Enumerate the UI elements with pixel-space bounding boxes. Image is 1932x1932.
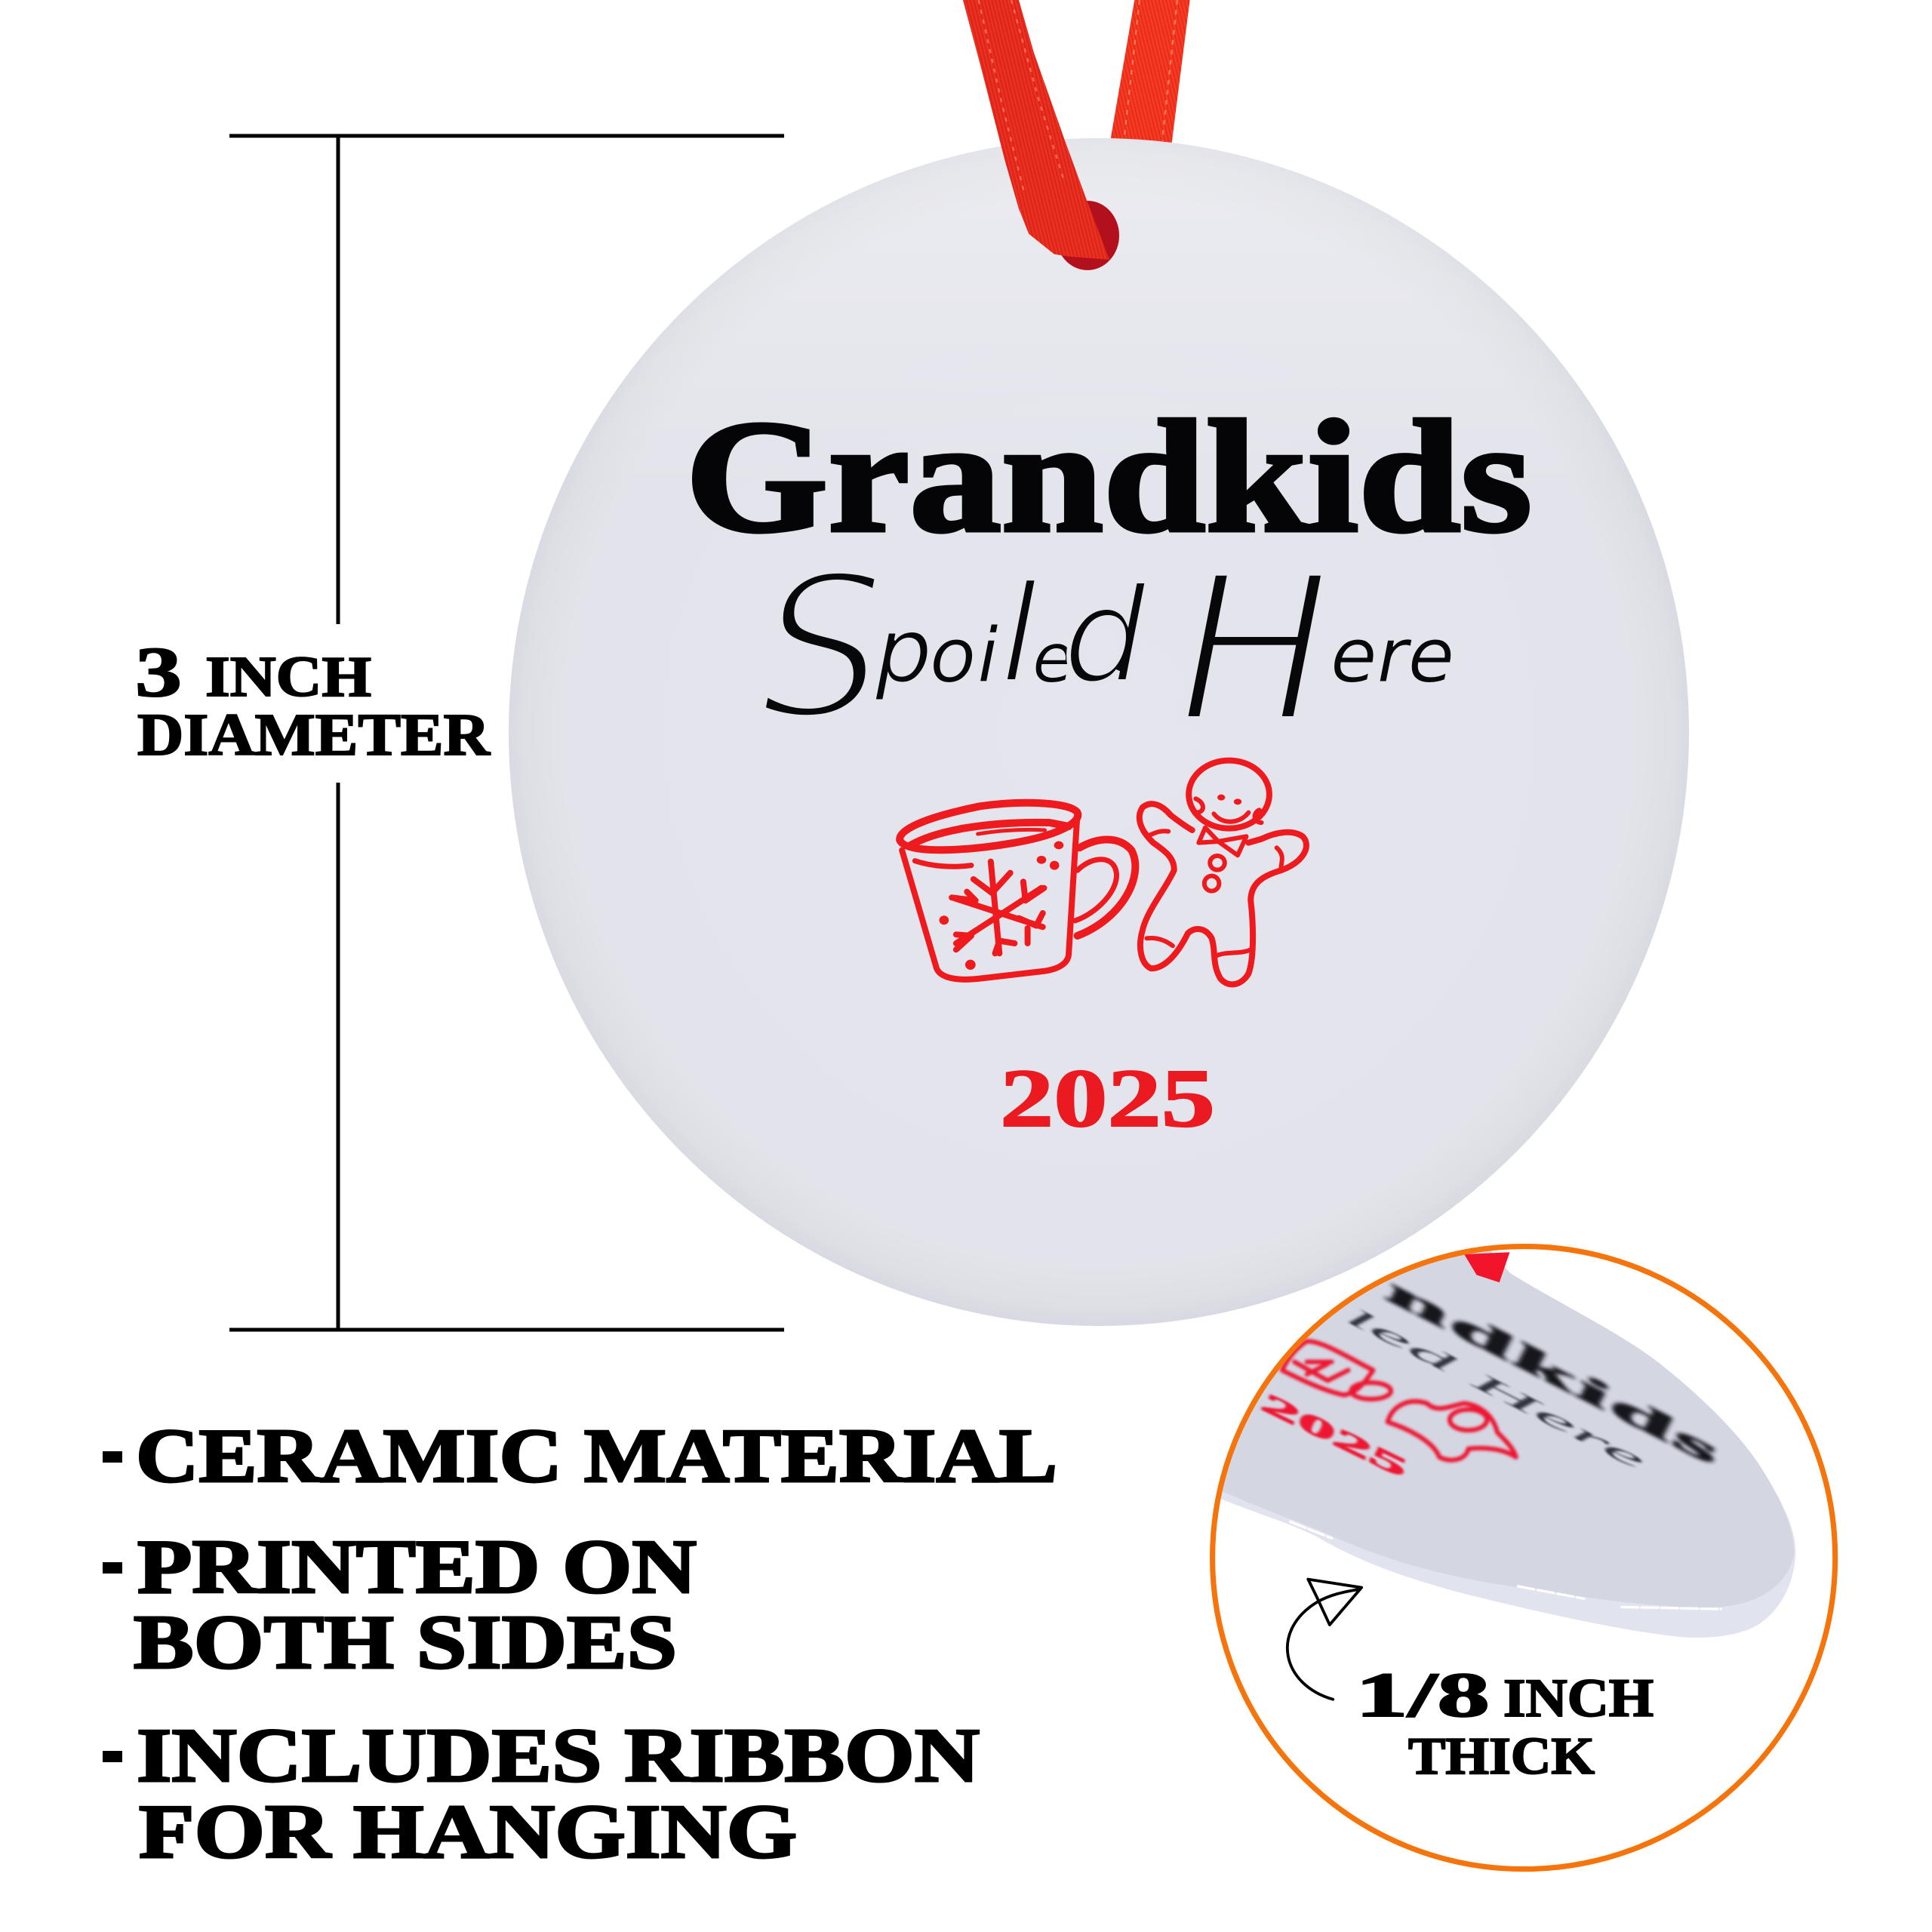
dimension bracket: 3 inch diameter (229, 136, 784, 1330)
hanging hole (1056, 201, 1119, 270)
lens blurred icons (1282, 1341, 1516, 1460)
ornament script: Spoiled Here: d (1063, 560, 1189, 713)
lens ornament side edge (1221, 1477, 1796, 1638)
lens orange ring (1213, 1247, 1835, 1869)
dimension label: 3 inch diameter: 3 (135, 633, 182, 712)
lens blurred title: ndkids (1380, 1270, 1729, 1474)
feature: ceramic material: CERAMIC MATERIAL (136, 1414, 1057, 1499)
lens blurred year: 2025 (1257, 1387, 1413, 1484)
ornament script: Spoiled Here: ere (1331, 611, 1454, 700)
dimension label: 3 inch diameter: INCH (205, 645, 371, 709)
lens ornament top face (1223, 1251, 1794, 1607)
feature: includes ribbon for hanging: INCLUDES RIBBON (137, 1713, 980, 1798)
feature: printed on both sides: BOTH SIDES (134, 1600, 677, 1685)
icon: gingerbread man (1140, 761, 1306, 984)
feature: includes ribbon for hanging: FOR HANGING (139, 1789, 797, 1875)
icon: mug with snowflake (900, 803, 1135, 980)
thickness label: 1/8 inch thick: INCH (1503, 1668, 1654, 1728)
ornament ribbon front strand (963, 0, 1109, 260)
lens ribbon stub (1464, 1252, 1509, 1282)
ornament script: Spoiled Here: l (1000, 556, 1038, 714)
ornament script: Spoiled Here: o (930, 611, 976, 700)
ornament title: Grandkids: Grandkids (685, 388, 1532, 566)
feature: printed on both sides: PRINTED ON (137, 1524, 697, 1610)
icon: curved arrow (1287, 1580, 1361, 1700)
ornament script: Spoiled Here: S (759, 532, 886, 764)
lens: side view detail (1187, 1229, 1835, 1869)
thickness label: 1/8 inch thick: THICK (1408, 1727, 1595, 1786)
dimension label: 3 inch diameter: DIAMETER (137, 703, 491, 768)
ornament script: Spoiled Here: p (875, 598, 932, 703)
ornament script: Spoiled Here: H (1177, 531, 1332, 770)
thickness label: 1/8 inch thick (1355, 1660, 1654, 1786)
feature list (103, 1414, 1057, 1875)
feature: printed on both sides (103, 1524, 697, 1685)
feature: includes ribbon for hanging (103, 1713, 980, 1875)
ornament script: Spoiled Here: e (1032, 619, 1074, 698)
ornament ribbon back strand (1111, 0, 1190, 143)
ceramic ornament disc (509, 138, 1689, 1326)
dimension label: 3 inch diameter (135, 633, 491, 768)
thickness label: 1/8 inch thick: 1/8 (1355, 1660, 1490, 1730)
lens blurred script: led Here (1342, 1301, 1649, 1476)
ornament year: 2025: 2025 (1000, 1052, 1215, 1144)
ornament script: Spoiled Here: i (977, 611, 998, 700)
